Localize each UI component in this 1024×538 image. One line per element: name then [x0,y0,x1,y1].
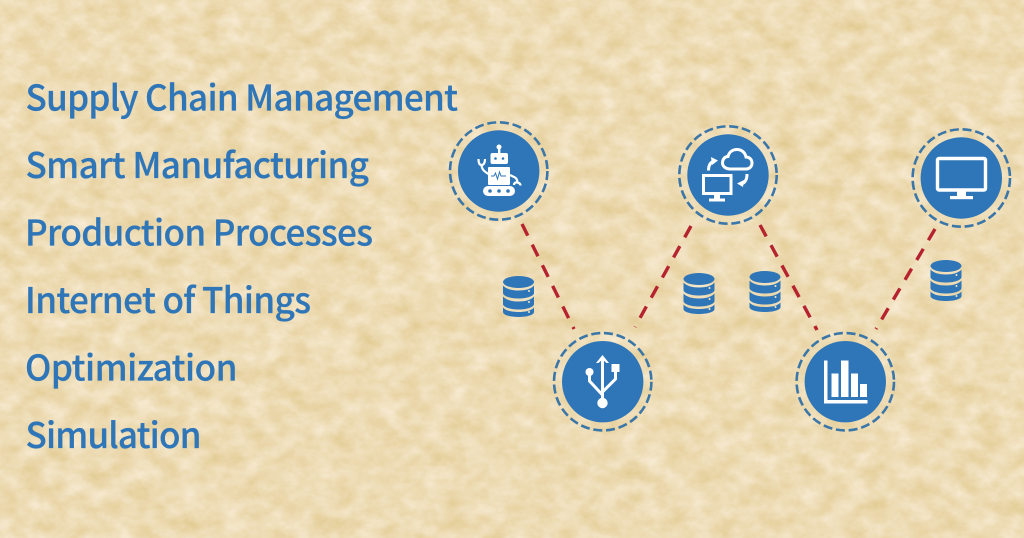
icon: database 4 [930,260,962,301]
icon: robot node [450,122,547,220]
arrow: monitor to chart [876,229,935,329]
arrow: cloud to USB [635,226,691,327]
icon: USB node [554,333,651,430]
icon: monitor node [913,129,1010,227]
icon: database 1 [503,276,534,317]
heading: Supply Chain Management: Supply Chain Management [26,70,458,122]
heading: Optimization: Optimization [25,340,238,392]
icon: database 2 [684,273,714,314]
arrow: robot to USB [522,224,574,329]
cloud [722,150,752,169]
computer [704,176,731,194]
list of topics [25,70,458,459]
icon: database 3 [750,271,780,312]
icon: cloud and computer node [679,126,777,224]
red dashed connectors [522,224,935,330]
icon: bar chart node [797,333,894,430]
sync arrows [708,161,714,170]
arrow: cloud to chart [760,225,817,330]
heading: Internet of Things: Internet of Things [25,273,311,324]
heading: Simulation: Simulation [26,408,202,459]
heading: Production Processes: Production Processes [25,206,373,256]
heading: Smart Manufacturing: Smart Manufacturing [26,138,369,189]
